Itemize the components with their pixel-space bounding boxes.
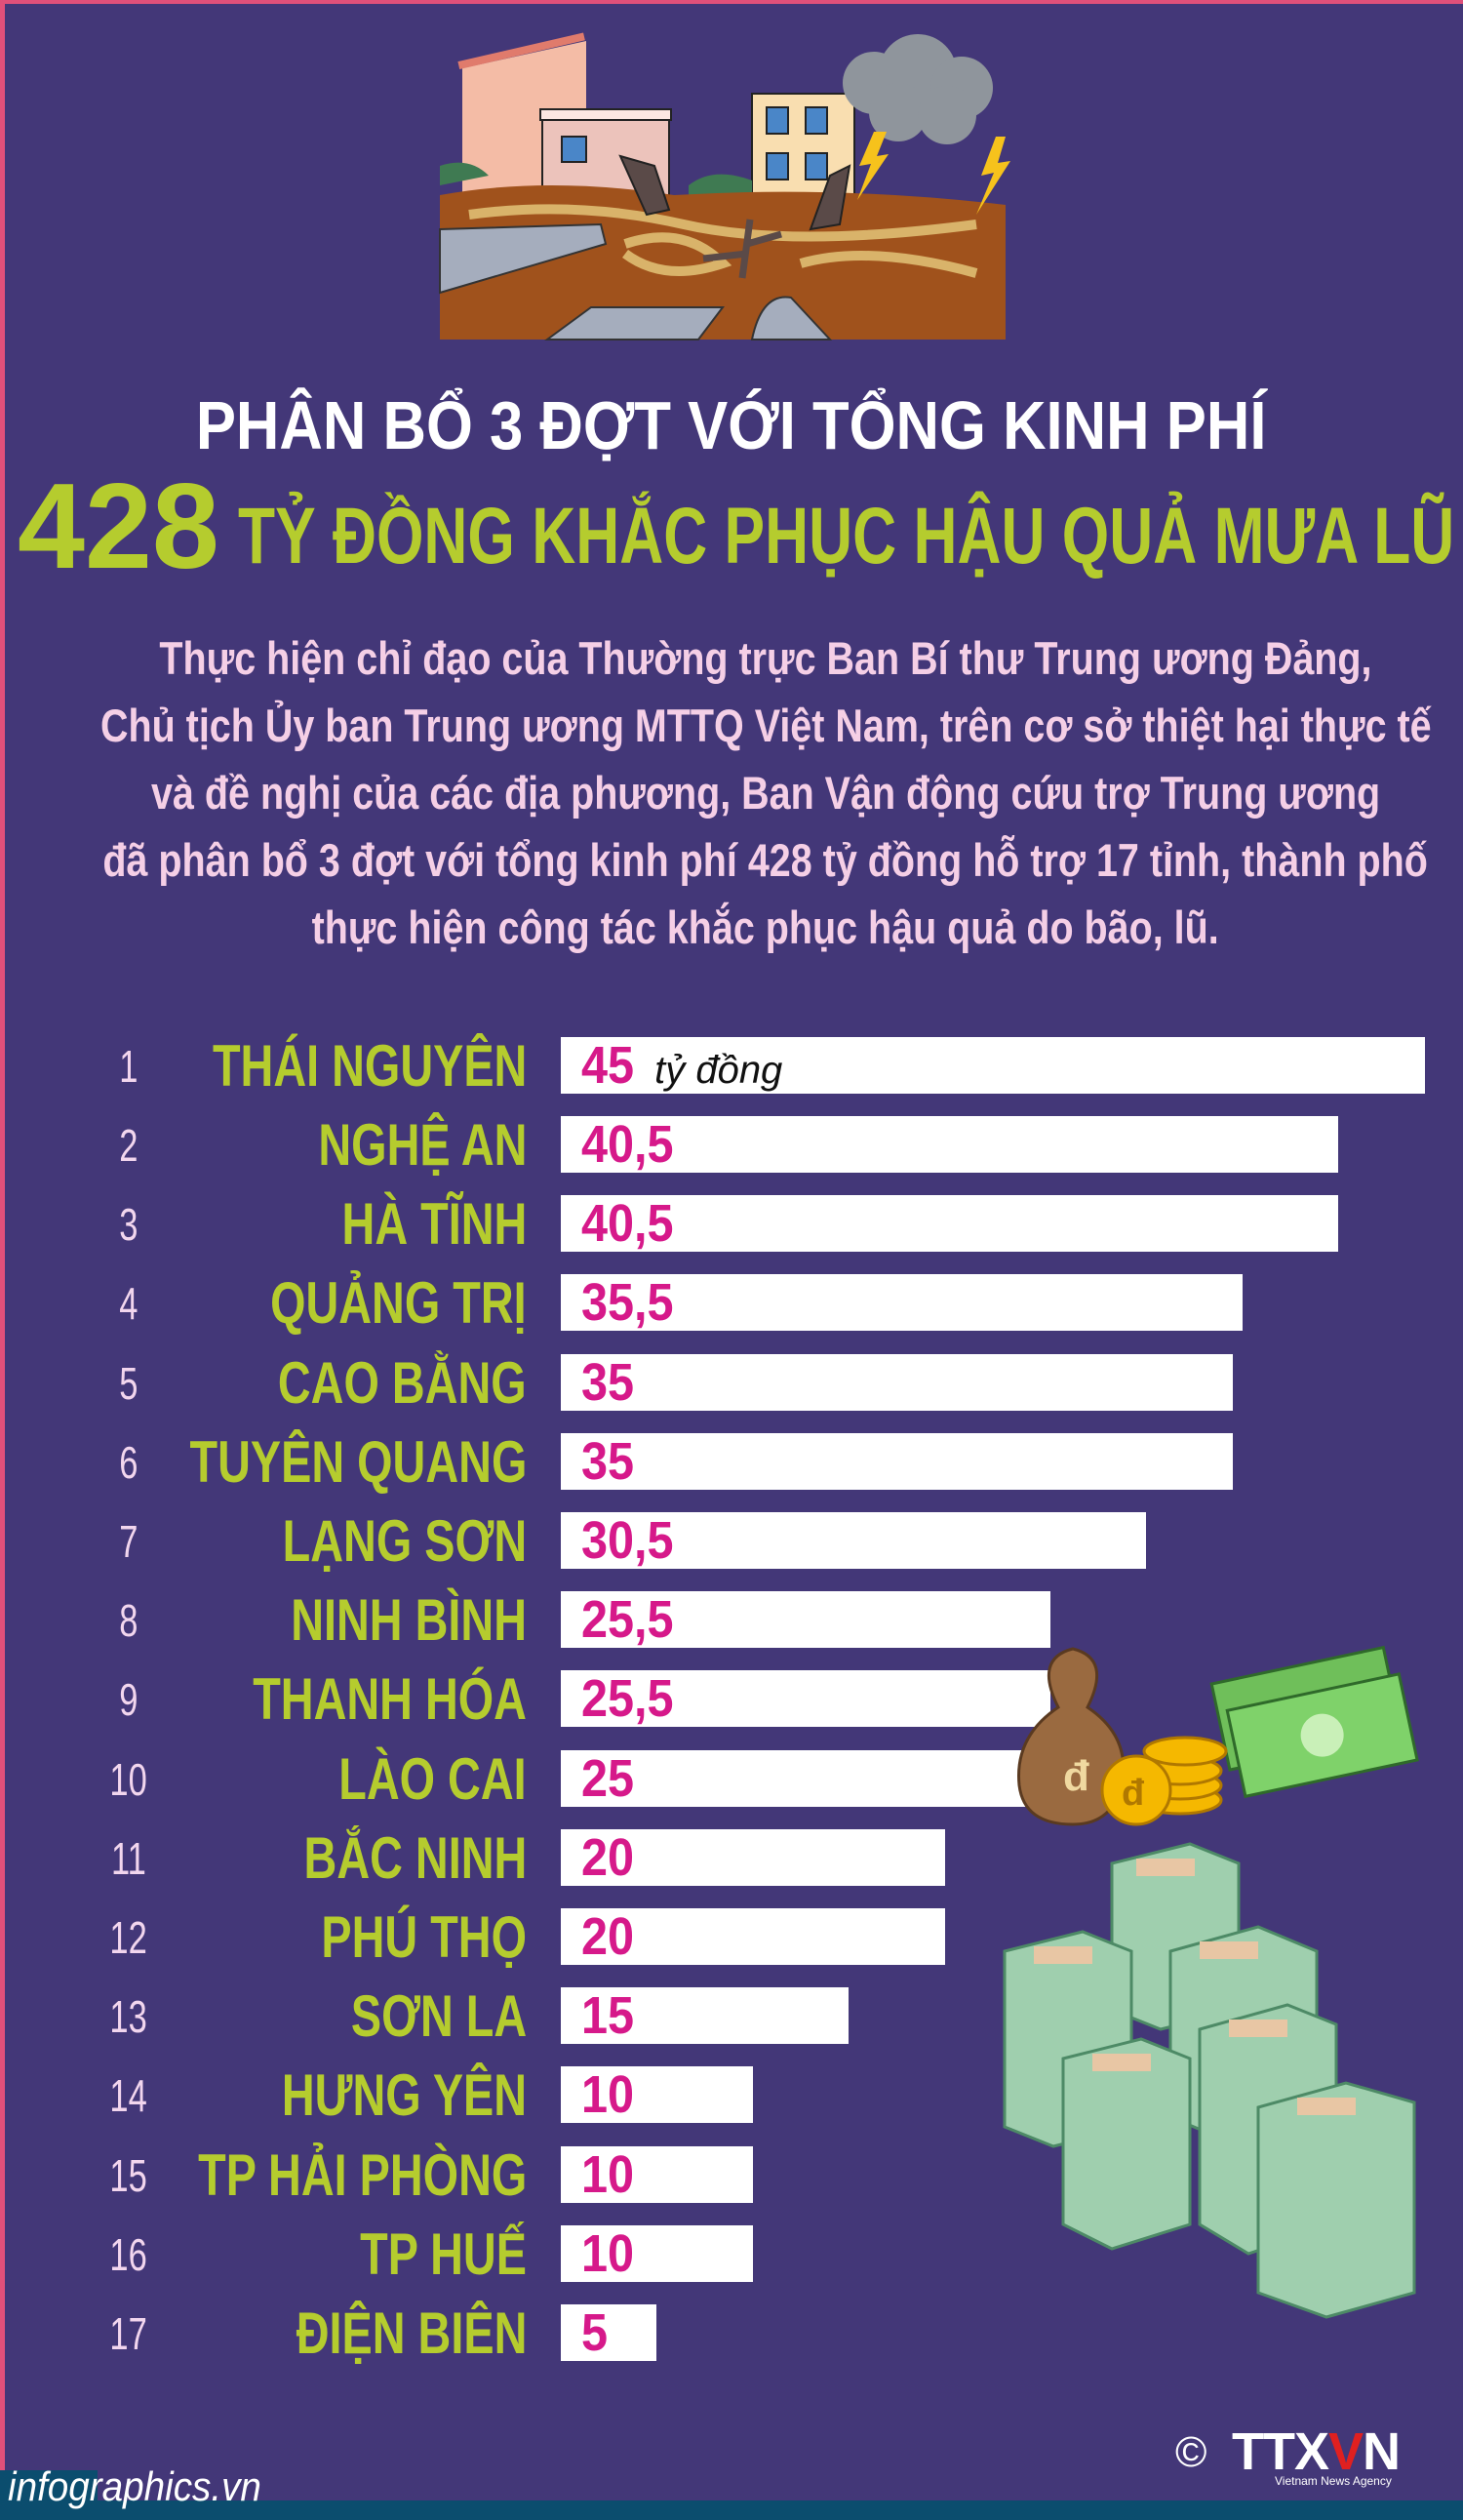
intro paragraph: và đề nghị của các địa phương, Ban Vận động cứu trợ Trung ương bbox=[151, 767, 1380, 819]
row 7 bbox=[119, 1508, 1146, 1574]
row 15: 10 bbox=[581, 2145, 634, 2204]
row 10: LÀO CAI bbox=[339, 1746, 527, 1812]
row 2: 2 bbox=[119, 1120, 138, 1171]
row 5: 5 bbox=[119, 1358, 138, 1409]
row 6: 35 bbox=[581, 1432, 634, 1491]
row 8: 25,5 bbox=[581, 1590, 674, 1649]
row 2: 40,5 bbox=[581, 1115, 674, 1174]
row 8: 8 bbox=[119, 1595, 138, 1646]
row 5: CAO BẰNG bbox=[278, 1350, 527, 1416]
row 12: 20 bbox=[581, 1907, 634, 1966]
row 9 bbox=[119, 1666, 1050, 1732]
row 9: 25,5 bbox=[581, 1669, 674, 1728]
row 16 bbox=[110, 2221, 753, 2287]
row 1: 45 bbox=[581, 1036, 634, 1095]
row 11: 11 bbox=[111, 1833, 146, 1884]
row 15 bbox=[110, 2142, 753, 2208]
footer strip bbox=[0, 2500, 1463, 2520]
row 3: HÀ TĨNH bbox=[341, 1191, 527, 1257]
row 14: 14 bbox=[110, 2070, 147, 2121]
row 10 bbox=[110, 1746, 1026, 1812]
row 11: 20 bbox=[581, 1828, 634, 1887]
row 17: 5 bbox=[581, 2303, 608, 2362]
row 1 bbox=[119, 1033, 1425, 1099]
row 13: 13 bbox=[110, 1991, 147, 2042]
row 16: TP HUẾ bbox=[360, 2221, 527, 2287]
row 16: 16 bbox=[110, 2229, 147, 2280]
logo: TTXVN: Vietnam News Agency bbox=[1275, 2474, 1392, 2488]
row 4 bbox=[119, 1270, 1243, 1336]
intro paragraph: thực hiện công tác khắc phục hậu quả do bão, lũ. bbox=[312, 901, 1219, 953]
footer text: infographics.vn: infographics.vn bbox=[8, 2463, 261, 2509]
bar chart bbox=[110, 1033, 1425, 2366]
border top bbox=[0, 0, 1463, 4]
illustration: flood scene bbox=[439, 33, 1010, 340]
row 10: 25 bbox=[581, 1749, 634, 1808]
row 2 bbox=[119, 1112, 1338, 1178]
row 9: THANH HÓA bbox=[253, 1666, 527, 1732]
intro paragraph: Thực hiện chỉ đạo của Thường trực Ban Bí thư Trung ương Đảng, bbox=[159, 632, 1372, 684]
row 12 bbox=[110, 1904, 945, 1970]
title line 2: 428: 428 bbox=[18, 460, 219, 594]
money illustration: đ bbox=[1063, 1752, 1089, 1800]
row 8 bbox=[119, 1587, 1050, 1653]
row 17: ĐIỆN BIÊN bbox=[296, 2300, 527, 2366]
row 7: 7 bbox=[119, 1516, 138, 1567]
row 2: NGHỆ AN bbox=[318, 1112, 527, 1178]
row 7: LẠNG SƠN bbox=[282, 1508, 527, 1574]
row 6 bbox=[119, 1429, 1233, 1495]
row 13: SƠN LA bbox=[351, 1983, 527, 2049]
row 17: 17 bbox=[110, 2308, 147, 2359]
row 5 bbox=[119, 1350, 1233, 1416]
logo: TTXVN: © bbox=[1175, 2428, 1206, 2476]
logo: TTXVN: TTXVN bbox=[1232, 2422, 1400, 2481]
row 12: 12 bbox=[110, 1912, 147, 1963]
footer tab bbox=[0, 2470, 98, 2504]
intro paragraph: Chủ tịch Ủy ban Trung ương MTTQ Việt Nam, trên cơ sở thiệt hại thực tế bbox=[100, 700, 1431, 751]
row 3: 3 bbox=[119, 1199, 138, 1250]
row 14 bbox=[110, 2062, 753, 2128]
row 1: 1 bbox=[119, 1041, 138, 1092]
row 11: BẮC NINH bbox=[303, 1825, 527, 1891]
intro paragraph: đã phân bổ 3 đợt với tổng kinh phí 428 tỷ đồng hỗ trợ 17 tỉnh, thành phố bbox=[103, 834, 1428, 886]
row 7: 30,5 bbox=[581, 1511, 674, 1570]
logo: TTXVN bbox=[1175, 2422, 1400, 2488]
row 6: TUYÊN QUANG bbox=[189, 1429, 527, 1495]
title line 2: rest: TỶ ĐỒNG KHẮC PHỤC HẬU QUẢ MƯA LŨ bbox=[238, 492, 1454, 580]
row 13: 15 bbox=[581, 1986, 634, 2045]
row 13 bbox=[110, 1983, 849, 2049]
intro paragraph bbox=[100, 632, 1432, 953]
row 3 bbox=[119, 1191, 1338, 1257]
row 6: 6 bbox=[119, 1437, 138, 1488]
row 11 bbox=[111, 1825, 945, 1891]
title line 1: PHÂN BỔ 3 ĐỢT VỚI TỔNG KINH PHÍ bbox=[196, 387, 1267, 463]
row 4: QUẢNG TRỊ bbox=[270, 1270, 527, 1336]
row 4: 4 bbox=[119, 1278, 138, 1329]
row 16: 10 bbox=[581, 2224, 634, 2283]
row 1: THÁI NGUYÊN bbox=[213, 1033, 527, 1099]
row 15: 15 bbox=[110, 2150, 147, 2201]
row 8: NINH BÌNH bbox=[291, 1587, 527, 1653]
row 14: HƯNG YÊN bbox=[282, 2062, 527, 2128]
row 10: 10 bbox=[110, 1754, 147, 1805]
money illustration bbox=[1003, 1645, 1419, 2319]
row 15: TP HẢI PHÒNG bbox=[198, 2142, 527, 2208]
row 14: 10 bbox=[581, 2065, 634, 2124]
row 12: PHÚ THỌ bbox=[321, 1904, 527, 1970]
border left bbox=[0, 0, 5, 2520]
row 3: 40,5 bbox=[581, 1194, 674, 1253]
money illustration: đ bbox=[1122, 1773, 1145, 1814]
row 5: 35 bbox=[581, 1353, 634, 1412]
row 4: 35,5 bbox=[581, 1273, 674, 1332]
row 1: tỷ đồng bbox=[654, 1049, 782, 1092]
row 17 bbox=[110, 2300, 656, 2366]
row 9: 9 bbox=[119, 1674, 138, 1725]
